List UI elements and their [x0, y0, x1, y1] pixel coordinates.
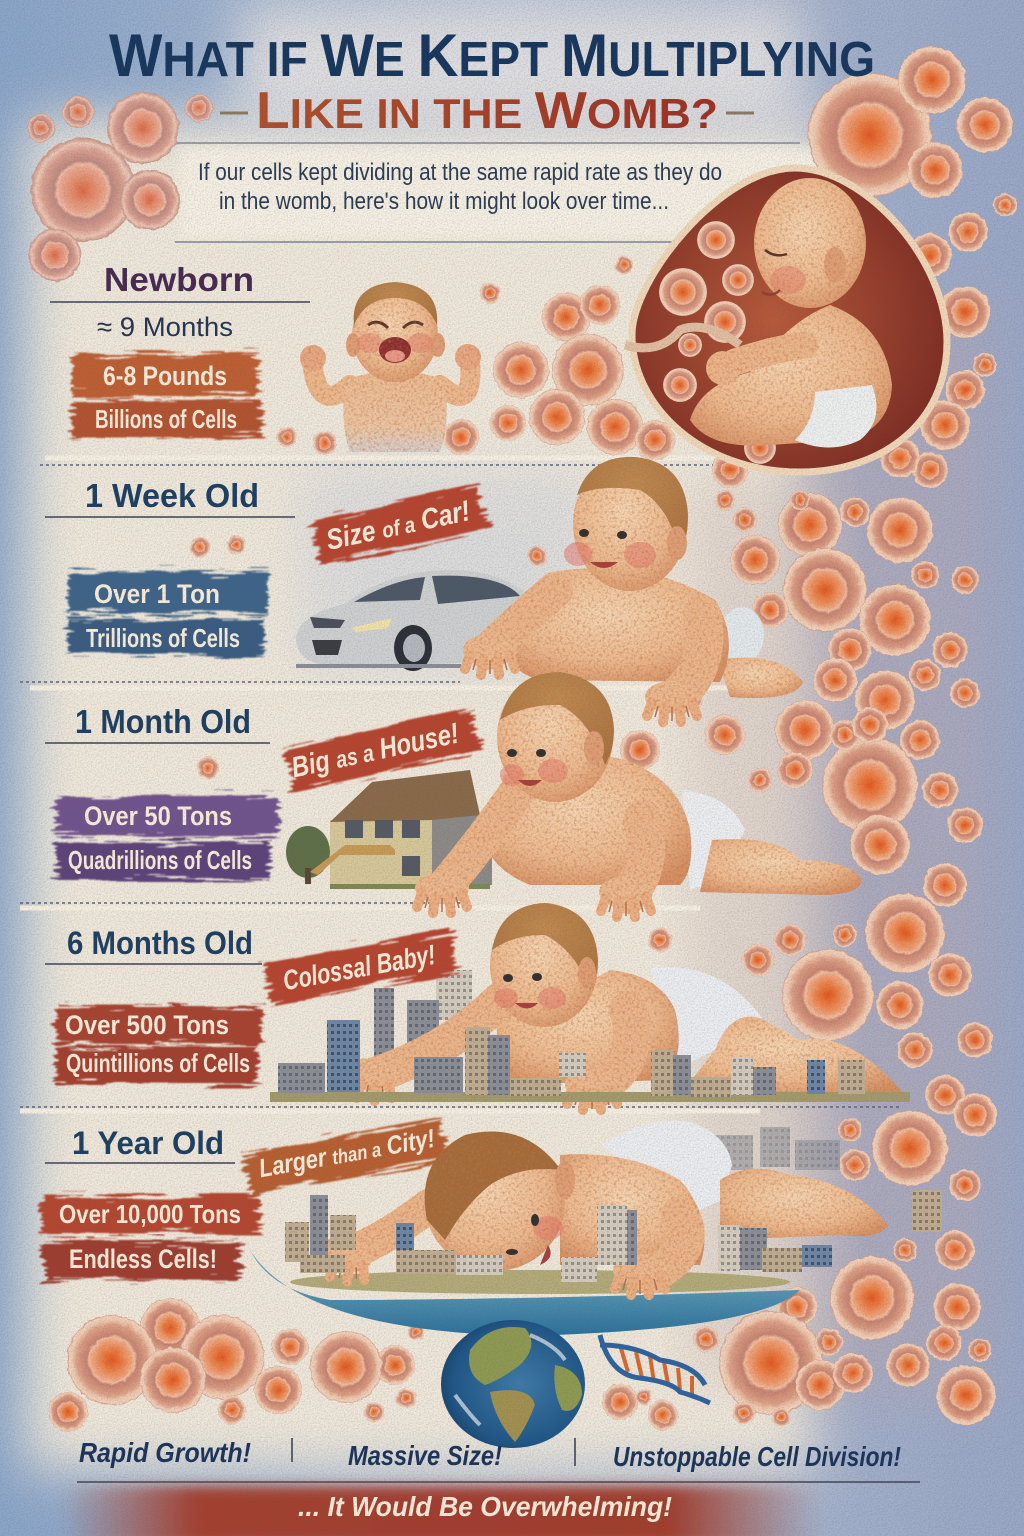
callout brush: larger than a city	[243, 1119, 447, 1195]
label: billions of cells: Billions of Cells	[95, 404, 237, 434]
icon: car	[296, 570, 535, 671]
icon: baby in womb	[690, 178, 892, 448]
icon: big baby	[463, 457, 803, 722]
icon: earth	[441, 1320, 585, 1448]
label: over 50 tons: Over 50 Tons	[84, 801, 232, 831]
bottom labels: Massive Size!	[348, 1440, 502, 1471]
panel: 6 months old	[56, 903, 910, 1110]
heading: 1 week old: 1 Week Old	[85, 477, 259, 514]
banner: weight	[56, 1006, 262, 1044]
banner: cells	[44, 1242, 240, 1280]
title: WHAT IF WE KEPT MULTIPLYING	[109, 22, 875, 89]
intro text: If our cells kept dividing at the same rapid rate as they do	[198, 159, 722, 186]
panel: newborn	[72, 261, 481, 452]
icon: island and sea	[250, 1250, 800, 1336]
heading rules	[45, 302, 310, 1163]
callout brush: colossal baby	[264, 930, 458, 1004]
banner: cells	[72, 400, 262, 438]
label: quadrillions: Quadrillions of Cells	[68, 845, 252, 875]
panel: 1 year old	[42, 1119, 942, 1336]
heading: 6 months old: 6 Months Old	[67, 925, 253, 961]
far city	[713, 1127, 840, 1170]
icon: city skyline	[270, 1020, 910, 1102]
heading: newborn: Newborn	[104, 261, 254, 298]
banner: cells	[56, 1047, 258, 1083]
banner: cells	[68, 619, 264, 655]
callout brush: big as a house	[286, 709, 481, 791]
label: over 1 ton: Over 1 Ton	[94, 579, 220, 609]
heading: 1 month old: 1 Month Old	[75, 703, 251, 740]
banner: cells	[56, 842, 270, 880]
callout: big as a house: Big as a House!	[289, 718, 462, 784]
icon: giant baby lying down	[312, 1121, 888, 1295]
banner: weight	[56, 796, 278, 836]
title	[109, 22, 875, 140]
far city	[374, 970, 472, 1068]
panel: 1 week old	[68, 457, 803, 722]
label: over 500 tons: Over 500 Tons	[65, 1010, 229, 1040]
callout: larger than a city: Larger than a City!	[256, 1123, 437, 1183]
label: trillions: Trillions of Cells	[86, 623, 240, 653]
callout: size of a car: Size of a Car!	[323, 495, 473, 557]
label: endless cells: Endless Cells!	[69, 1244, 217, 1274]
icon: bigger baby	[415, 672, 862, 917]
bottom labels	[77, 1437, 920, 1482]
label: quintillions: Quintillions of Cells	[66, 1048, 250, 1078]
age: 9 months: ≈ 9 Months	[97, 312, 233, 342]
label: over 10,000 tons: Over 10,000 Tons	[59, 1199, 241, 1229]
intro text	[198, 159, 722, 215]
bottom labels: Rapid Growth!	[79, 1437, 251, 1468]
panel tints	[20, 143, 900, 1111]
callout: colossal baby: Colossal Baby!	[281, 939, 438, 996]
womb illustration	[625, 168, 947, 472]
banner: weight	[42, 1196, 260, 1234]
conclusion banner	[60, 1486, 820, 1536]
icon: huge baby	[339, 903, 905, 1110]
conclusion banner: ... It Would Be Overwhelming!	[298, 1491, 672, 1522]
heading: 1 year old: 1 Year Old	[72, 1125, 224, 1161]
callout brush: size of a car	[312, 485, 488, 565]
umbilical cord	[625, 327, 740, 348]
icon: city on island	[285, 1190, 942, 1282]
banner: weight	[68, 572, 268, 614]
icon: dna helix	[600, 1335, 710, 1403]
panel: 1 month old	[56, 672, 862, 917]
label: pounds: 6-8 Pounds	[103, 361, 227, 391]
banner: weight	[72, 354, 258, 396]
bottom labels: Unstoppable Cell Division!	[613, 1441, 901, 1472]
intro text: in the womb, here's how it might look over time...	[219, 188, 669, 215]
icon: house	[286, 770, 492, 889]
icon: crying baby	[300, 282, 481, 452]
title: LIKE IN THE WOMB?	[256, 82, 718, 140]
